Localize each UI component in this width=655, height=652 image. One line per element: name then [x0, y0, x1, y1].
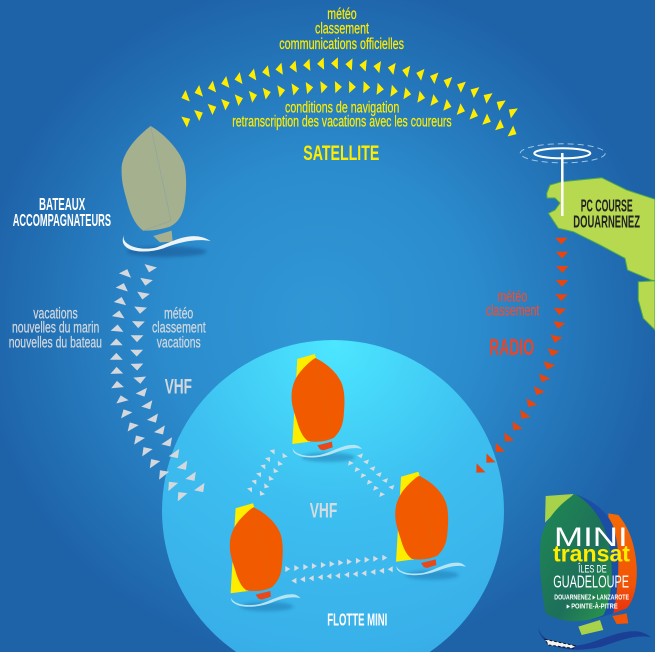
label: bateaux accompagnateurs — [13, 194, 111, 230]
heading: VHF: VHF — [165, 373, 192, 398]
VHF text: left: vacations — [33, 305, 78, 322]
satellite arrows: lower arc — [181, 81, 519, 140]
satellite text: downlink: météo — [327, 6, 357, 23]
label: flotte mini: FLOTTE MINI — [327, 610, 387, 630]
fleet arrows: bottom — [285, 555, 393, 584]
VHF text: left: nouvelles du marin — [12, 320, 99, 337]
radio text — [486, 289, 540, 320]
heading: SATELLITE: SATELLITE — [303, 140, 379, 165]
VHF text: left: nouvelles du bateau — [9, 334, 102, 351]
VHF arrows: towards boat — [110, 267, 188, 501]
satellite text: uplink — [232, 99, 452, 131]
boat: fleet top — [292, 354, 362, 462]
VHF text: right: classement — [152, 320, 206, 337]
fleet circle — [162, 340, 504, 652]
logo: Mini Transat: ÎLES DE — [578, 563, 607, 576]
satellite text: uplink: conditions de navigation — [285, 99, 399, 116]
satellite text: downlink — [279, 6, 404, 53]
VHF text: right: vacations — [157, 334, 201, 351]
satellite text: downlink: communications officielles — [279, 36, 404, 53]
VHF text: right — [152, 305, 206, 351]
label: bateaux accompagnateurs: BATEAUX — [39, 194, 86, 214]
boat: fleet right — [395, 472, 466, 580]
logo: Mini Transat — [538, 494, 651, 650]
escort boat — [122, 126, 211, 257]
label: bateaux accompagnateurs: ACCOMPAGNATEURS — [13, 210, 111, 230]
land: Douarnenez coast — [547, 178, 655, 330]
radio text: classement — [486, 303, 540, 320]
satellite text: downlink: classement — [315, 21, 369, 38]
fleet arrows: top-right — [346, 453, 396, 497]
VHF text: left — [9, 305, 102, 351]
logo: Mini Transat: ▸ POINTE-À-PITRE — [566, 602, 618, 611]
radio text: météo — [497, 289, 527, 306]
VHF text: right: météo — [164, 305, 193, 322]
fleet arrows: top-left — [247, 447, 288, 498]
VHF arrows: towards fleet — [130, 264, 208, 496]
logo: Mini Transat: transat — [553, 540, 630, 566]
satellite arrows: upper arc — [179, 57, 518, 118]
label: PC course — [573, 196, 640, 231]
antenna — [520, 144, 605, 216]
radio arrows — [472, 238, 569, 477]
label: fleet VHF: VHF — [310, 498, 337, 523]
boat: fleet left — [230, 503, 301, 611]
satellite text: uplink: retranscription des vacations avec les coureurs — [232, 114, 452, 131]
logo: Mini Transat: MINI — [554, 522, 628, 552]
heading: RADIO: RADIO — [489, 334, 534, 360]
